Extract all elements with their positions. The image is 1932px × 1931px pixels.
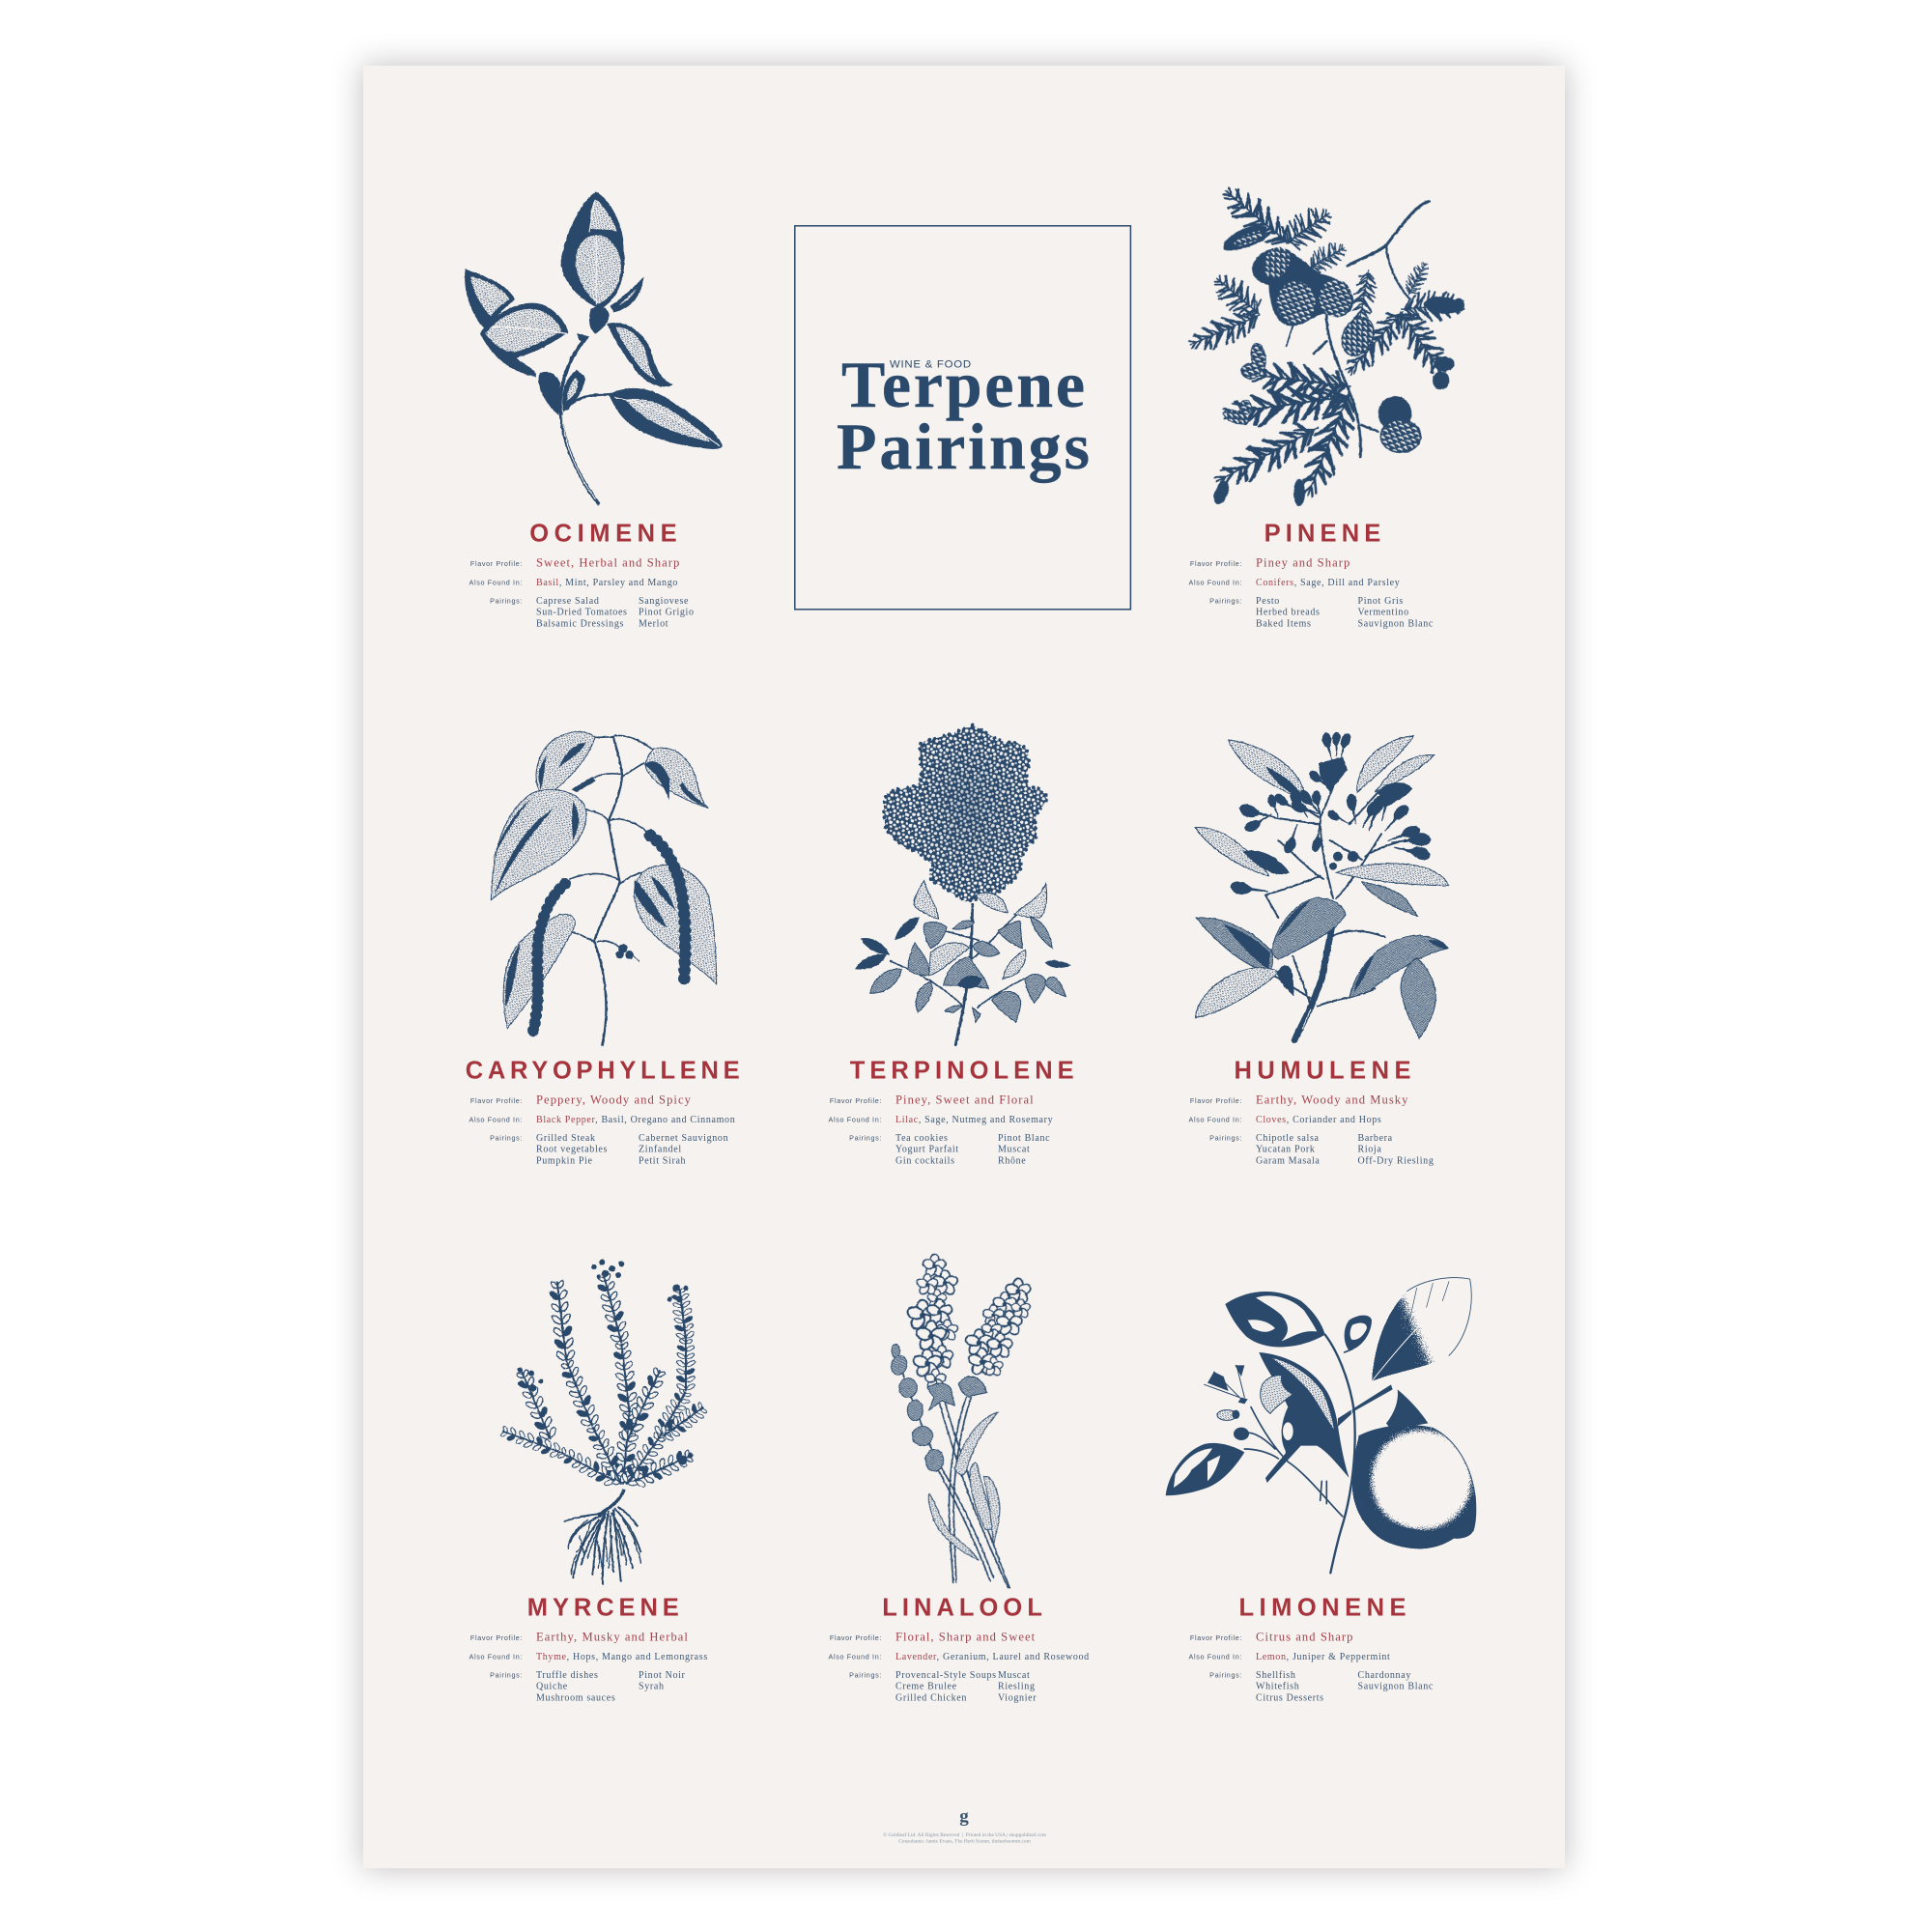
- title box: [795, 226, 1130, 610]
- details: Chipotle salsa: [1256, 1133, 1320, 1144]
- heading: LIMONENE: [1238, 1594, 1406, 1621]
- details: Floral, Sharp and Sweet: [895, 1631, 1036, 1644]
- details: Basil, Mint, Parsley and Mango: [536, 578, 678, 588]
- lavender florets: [906, 1254, 1032, 1391]
- main title: Pairings: [837, 410, 1090, 483]
- details: Flavor Profile:: [830, 1096, 882, 1105]
- details: Pairings:: [490, 1134, 523, 1142]
- details: Zinfandel: [639, 1145, 682, 1155]
- details: Pairings:: [490, 1671, 523, 1679]
- illustration: lemon branch: [1166, 1278, 1476, 1573]
- details: Lilac, Sage, Nutmeg and Rosemary: [895, 1115, 1053, 1125]
- details: Conifers, Sage, Dill and Parsley: [1256, 578, 1400, 588]
- details: Quiche: [536, 1682, 568, 1692]
- details: Also Found In:: [829, 1652, 882, 1661]
- details: Root vegetables: [536, 1145, 608, 1155]
- panel: terpinolene: [829, 725, 1074, 1166]
- panel: linalool: [829, 1254, 1090, 1703]
- details: Sauvignon Blanc: [1358, 618, 1434, 629]
- details: Flavor Profile:: [470, 1633, 523, 1642]
- illustration: lilac: [855, 725, 1071, 1045]
- heading: OCIMENE: [529, 520, 677, 547]
- details: Also Found In:: [829, 1115, 882, 1124]
- heading: TERPINOLENE: [850, 1057, 1074, 1084]
- details: Flavor Profile:: [1190, 1633, 1242, 1642]
- heading: PINENE: [1264, 520, 1380, 547]
- details: Caprese Salad: [536, 596, 600, 607]
- details: Pairings:: [1209, 597, 1242, 605]
- details: Rioja: [1358, 1145, 1381, 1155]
- details: Cabernet Sauvignon: [639, 1133, 728, 1144]
- heading: HUMULENE: [1235, 1057, 1410, 1084]
- details: [469, 1631, 708, 1703]
- details: Sweet, Herbal and Sharp: [536, 556, 680, 570]
- details: Lemon, Juniper & Peppermint: [1256, 1652, 1390, 1662]
- details: Citrus and Sharp: [1256, 1631, 1353, 1644]
- heading: MYRCENE: [527, 1594, 679, 1621]
- heading: LINALOOL: [882, 1594, 1042, 1621]
- details: Baked Items: [1256, 618, 1312, 629]
- details: Creme Brulee: [895, 1682, 957, 1692]
- panel: caryophyllene: [466, 732, 740, 1166]
- details: Cloves, Coriander and Hops: [1256, 1115, 1381, 1125]
- details: Whitefish: [1256, 1682, 1299, 1692]
- details: Truffle dishes: [536, 1670, 599, 1681]
- details: Piney, Sweet and Floral: [895, 1093, 1035, 1107]
- details: [1189, 556, 1434, 629]
- details: Flavor Profile:: [1190, 559, 1242, 568]
- details: Earthy, Musky and Herbal: [536, 1631, 689, 1644]
- details: Piney and Sharp: [1256, 556, 1350, 570]
- details: Provencal-Style Soups: [895, 1670, 997, 1681]
- details: [829, 1093, 1053, 1166]
- illustration: black pepper: [491, 732, 717, 1045]
- details: Pinot Gris: [1358, 596, 1404, 607]
- details: Grilled Chicken: [895, 1692, 967, 1703]
- kicker: WINE & FOOD: [890, 359, 972, 371]
- details: Petit Sirah: [639, 1155, 686, 1166]
- illustration: basil sprig: [465, 191, 723, 503]
- panel: myrcene: [469, 1260, 710, 1703]
- details: Thyme, Hops, Mango and Lemongrass: [536, 1652, 708, 1662]
- details: Sangiovese: [639, 596, 689, 607]
- details: Sauvignon Blanc: [1358, 1682, 1434, 1692]
- details: Also Found In:: [1189, 578, 1242, 587]
- details: [469, 556, 695, 629]
- details: Flavor Profile:: [830, 1633, 882, 1642]
- details: Flavor Profile:: [470, 1096, 523, 1105]
- details: Pesto: [1256, 596, 1280, 607]
- details: Merlot: [639, 618, 668, 629]
- details: Pinot Blanc: [998, 1133, 1050, 1144]
- details: [469, 1093, 735, 1166]
- details: Syrah: [639, 1682, 665, 1692]
- details: Also Found In:: [469, 1652, 523, 1661]
- footer credits: [883, 1832, 1047, 1845]
- illustration: thyme: [498, 1260, 710, 1584]
- heading: CARYOPHYLLENE: [466, 1057, 740, 1084]
- details: Black Pepper, Basil, Oregano and Cinnamon: [536, 1115, 735, 1125]
- details: Pinot Noir: [639, 1670, 686, 1681]
- illustration: lavender: [889, 1254, 1032, 1587]
- panel: humulene: [1189, 732, 1448, 1166]
- footer credits: © Goldleaf Ltd. All Rights Reserved | Printed in the USA | shopgoldleaf.com: [883, 1832, 1047, 1838]
- details: Riesling: [998, 1682, 1036, 1692]
- footer credits: Consultants: Jamie Evans, The Herb Somm, theherbsomm.com: [898, 1839, 1032, 1845]
- details: Pairings:: [490, 597, 523, 605]
- panel: pinene: [1185, 180, 1464, 629]
- details: Also Found In:: [1189, 1652, 1242, 1661]
- details: Yucatan Pork: [1256, 1145, 1316, 1155]
- details: Pairings:: [849, 1671, 882, 1679]
- details: Muscat: [998, 1670, 1030, 1681]
- details: Pumpkin Pie: [536, 1155, 593, 1166]
- details: [1189, 1093, 1434, 1166]
- details: Herbed breads: [1256, 608, 1321, 618]
- details: Rhône: [998, 1155, 1026, 1166]
- poster sheet: [363, 66, 1565, 1868]
- details: Also Found In:: [469, 1115, 523, 1124]
- details: Pairings:: [1209, 1134, 1242, 1142]
- panel: limonene: [1166, 1278, 1476, 1703]
- details: Pinot Grigio: [639, 608, 695, 618]
- details: Balsamic Dressings: [536, 618, 624, 629]
- details: Sun-Dried Tomatoes: [536, 608, 628, 618]
- details: Shellfish: [1256, 1670, 1296, 1681]
- details: Barbera: [1358, 1133, 1393, 1144]
- details: Off-Dry Riesling: [1358, 1155, 1434, 1166]
- details: Citrus Desserts: [1256, 1692, 1324, 1703]
- details: Flavor Profile:: [470, 559, 523, 568]
- details: Earthy, Woody and Musky: [1256, 1093, 1409, 1107]
- main title: Terpene: [841, 348, 1085, 421]
- details: [1189, 1631, 1434, 1703]
- main title: [837, 348, 1090, 483]
- details: Pairings:: [849, 1134, 882, 1142]
- details: Flavor Profile:: [1190, 1096, 1242, 1105]
- details: Vermentino: [1358, 608, 1409, 618]
- details: Yogurt Parfait: [895, 1145, 959, 1155]
- details: Muscat: [998, 1145, 1030, 1155]
- details: Viognier: [998, 1692, 1037, 1703]
- details: Pairings:: [1209, 1671, 1242, 1679]
- details: Also Found In:: [1189, 1115, 1242, 1124]
- details: Also Found In:: [469, 578, 523, 587]
- details: Gin cocktails: [895, 1155, 955, 1166]
- details: Lavender, Geranium, Laurel and Rosewood: [895, 1652, 1090, 1662]
- details: Mushroom sauces: [536, 1692, 615, 1703]
- details: Grilled Steak: [536, 1133, 596, 1144]
- details: Garam Masala: [1256, 1155, 1321, 1166]
- details: [829, 1631, 1090, 1703]
- details: Chardonnay: [1358, 1670, 1411, 1681]
- illustration: clove: [1195, 732, 1448, 1040]
- details: Peppery, Woody and Spicy: [536, 1093, 692, 1107]
- illustration: pine branch: [1185, 180, 1464, 506]
- footer logo: g: [959, 1806, 969, 1827]
- details: Tea cookies: [895, 1133, 949, 1144]
- panel: ocimene: [465, 191, 723, 629]
